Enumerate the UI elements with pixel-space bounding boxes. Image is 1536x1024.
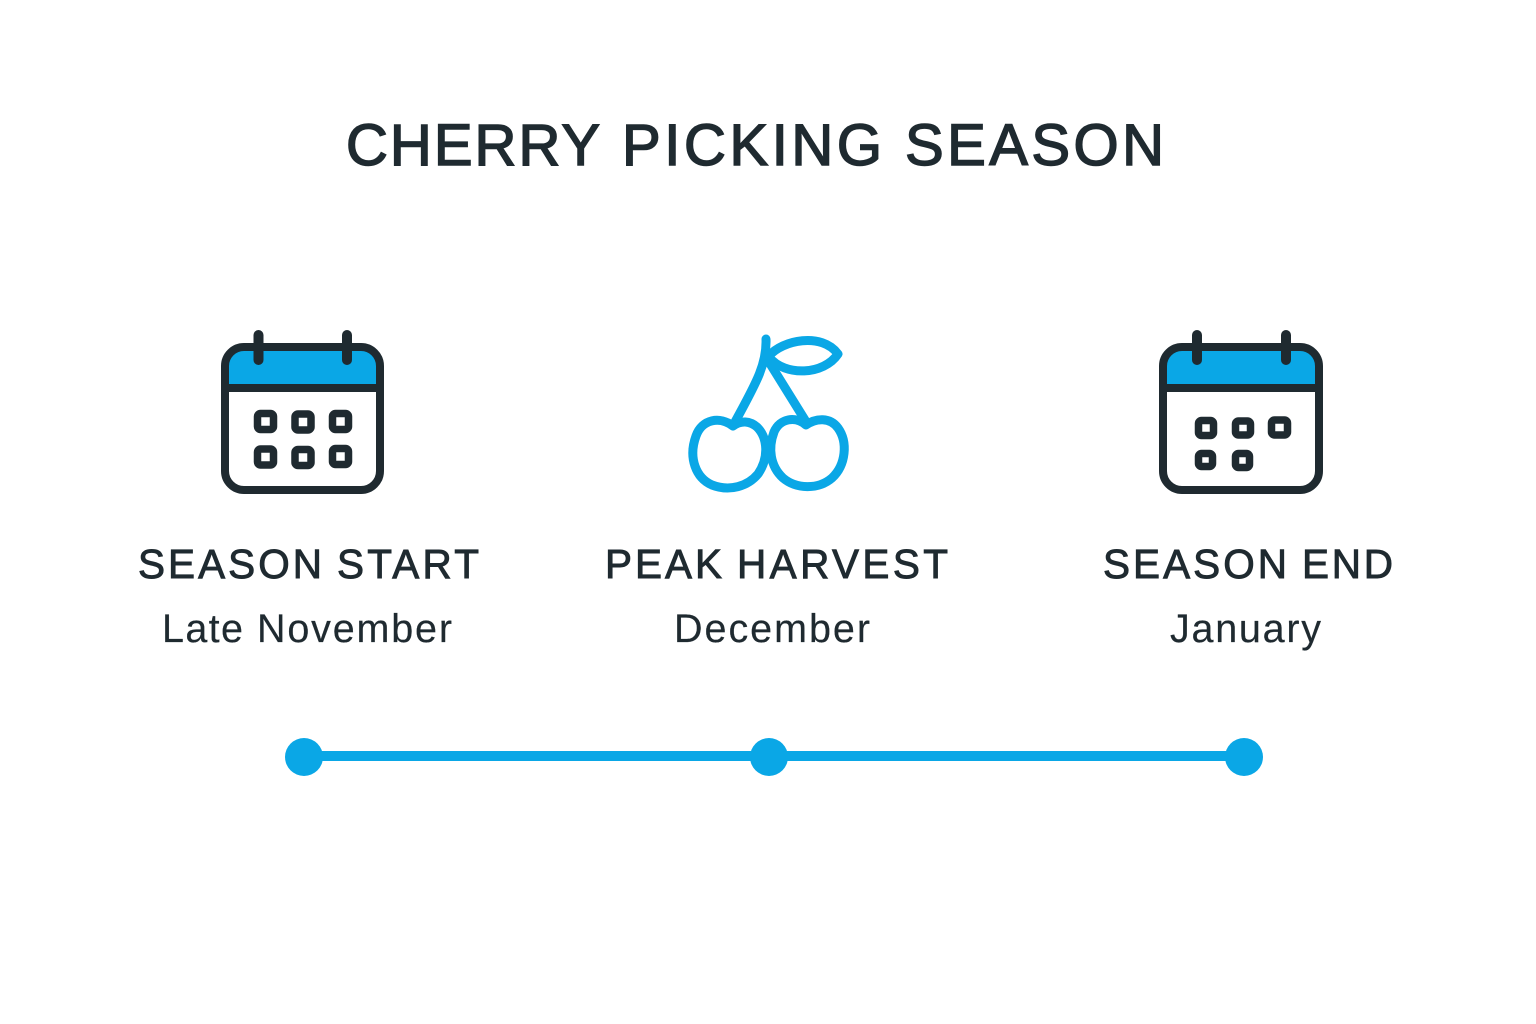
label: peak harvest: PEAK — [605, 541, 722, 587]
label: peak harvest — [605, 541, 948, 651]
title: CHERRY — [346, 113, 600, 178]
label: season start: Late — [162, 607, 243, 651]
label: season start: START — [337, 541, 479, 587]
icon: season start calendar — [225, 335, 380, 490]
timeline — [285, 738, 1263, 776]
label: season end — [1103, 541, 1393, 651]
label: season start — [138, 541, 479, 651]
title: SEASON — [905, 113, 1164, 178]
label: peak harvest: December — [674, 607, 870, 651]
label: season end: SEASON — [1103, 541, 1287, 587]
label: season start: November — [257, 607, 452, 651]
label: peak harvest: HARVEST — [737, 541, 948, 587]
icon: cherries — [693, 339, 844, 488]
label: season end: January — [1170, 607, 1321, 651]
label: season start: SEASON — [138, 541, 322, 587]
title — [346, 113, 1164, 178]
icon: season end calendar — [1163, 335, 1319, 490]
title: PICKING — [622, 113, 882, 178]
label: season end: END — [1302, 541, 1393, 587]
